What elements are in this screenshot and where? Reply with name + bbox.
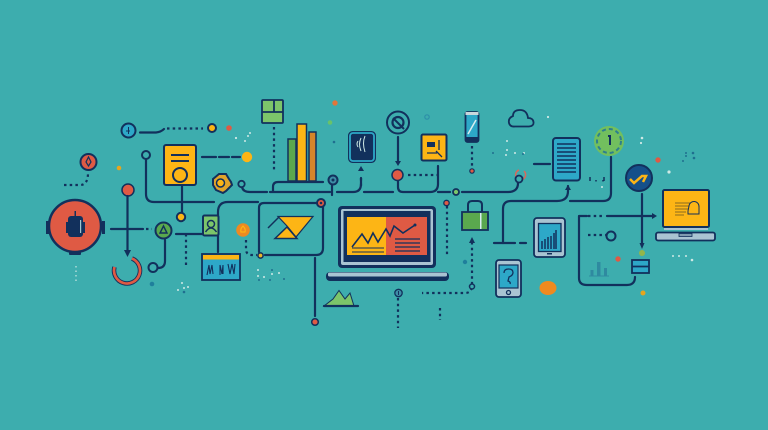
node: green junction <box>453 189 459 195</box>
icon: server tile <box>553 138 580 180</box>
icon: camera node <box>328 176 338 195</box>
arrow: up into sound tile <box>358 166 364 171</box>
icon: green profile card <box>203 216 218 236</box>
icon: orange gear <box>213 174 232 193</box>
icon: yellow circuit chip <box>422 134 446 160</box>
node: open ring lower left <box>148 240 165 272</box>
icon: cloud <box>509 110 534 127</box>
node: yellow dot right of document <box>242 152 252 162</box>
node: red dot on lower line <box>312 319 318 325</box>
icon: green grid tile <box>262 100 283 123</box>
arrow: line to right laptop <box>652 213 657 219</box>
node: small yellow junction <box>258 253 263 258</box>
icon: green triangle node <box>156 222 172 238</box>
arrow: target to red node <box>395 137 401 166</box>
chart: green mountain <box>324 290 358 306</box>
icon: check badge <box>626 165 652 191</box>
icon: orange blob <box>540 281 556 295</box>
icon: list box <box>632 260 649 273</box>
node: yellow dot below document <box>177 213 185 221</box>
icon: green badge <box>594 126 624 156</box>
node: open ring above document line <box>142 151 150 159</box>
icon: red location pin <box>80 154 96 170</box>
pale sparkle specks <box>177 116 693 291</box>
node: red dot with down arrow <box>122 184 134 257</box>
icon: blue gauge node <box>122 124 136 138</box>
arrow: robot to green node <box>111 228 152 230</box>
icon: robot badge <box>46 200 105 255</box>
bar chart: three columns <box>273 124 323 191</box>
dark specks <box>183 141 695 293</box>
arrow: up to server <box>565 185 571 190</box>
icon: document with circle <box>164 145 196 185</box>
chart: small teal bars <box>589 262 609 276</box>
dashed connectors <box>64 127 606 328</box>
icon: bulb marker <box>395 289 402 297</box>
icon: red power ring <box>516 170 526 182</box>
panel: waveform card <box>202 254 240 280</box>
icon: central laptop <box>326 206 449 281</box>
node: red circle <box>392 170 403 180</box>
icon: smartphone top <box>466 112 478 142</box>
icon: target ring <box>387 112 409 134</box>
node: red ringed corner <box>317 199 325 207</box>
icon: tablet chart <box>534 218 565 257</box>
connector: blue node to yellow dot <box>140 124 216 132</box>
node: small red dot under phone <box>470 169 474 173</box>
icon: sound tile <box>348 132 376 162</box>
icon: orange flame <box>236 223 250 237</box>
panel: chevron diagram <box>259 203 323 255</box>
icon: right laptop <box>656 190 715 240</box>
icon: green padlock <box>462 201 488 230</box>
tick marks by server <box>590 177 604 182</box>
arrow: up to padlock <box>469 237 475 289</box>
node: open ring near gear <box>238 181 245 187</box>
arrow: check to list <box>640 243 644 249</box>
node: open ring right of tablet <box>606 232 616 240</box>
icon: red hook <box>114 258 140 284</box>
node: red dot right of laptop <box>444 200 449 206</box>
dot accents <box>117 100 661 296</box>
icon: phone with question mark <box>496 260 521 297</box>
connector lines <box>146 157 652 316</box>
